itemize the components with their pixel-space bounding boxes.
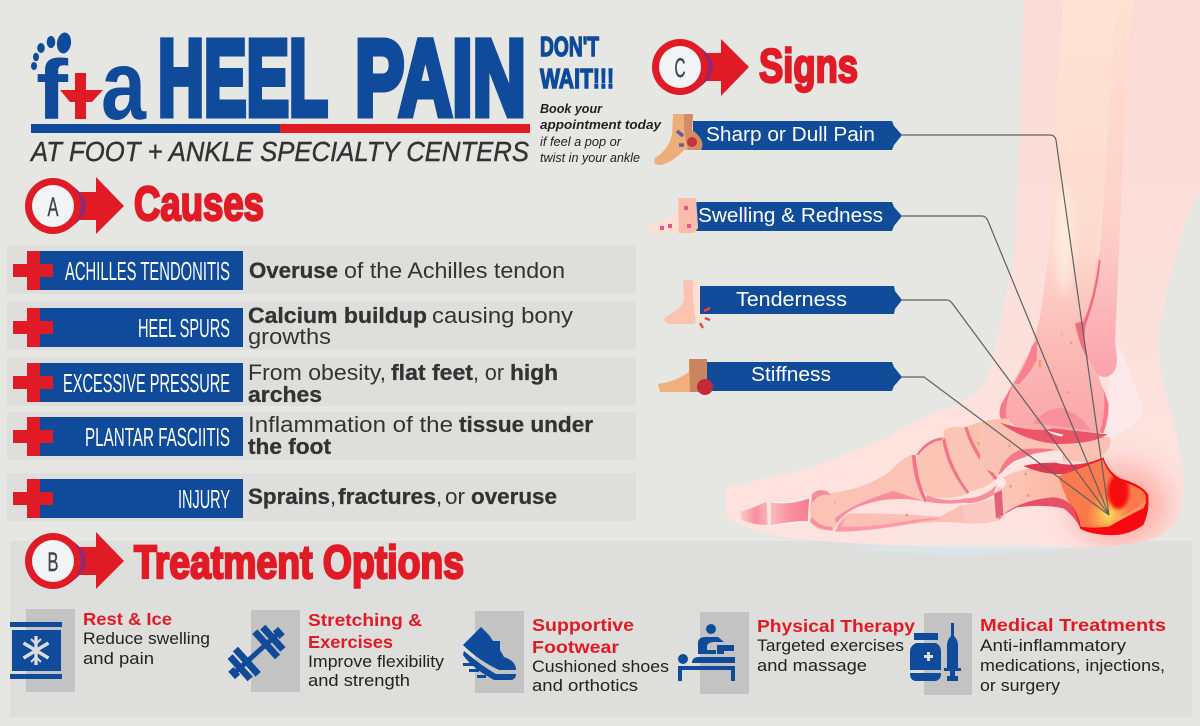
- middle foot segment: [916, 438, 968, 498]
- treatment: rest and ice: and pain: [83, 650, 154, 668]
- call to action: if feel a pop or: [540, 135, 622, 149]
- icon: therapist and patient: [678, 624, 735, 681]
- treatment: stretching and exercises: Exercises: [308, 632, 393, 652]
- heading: C signs: [652, 39, 858, 96]
- treatment: physical therapy: and massage: [757, 657, 867, 675]
- logo: foot + ankle: f: [36, 43, 69, 137]
- call to action: twist in your ankle: [540, 151, 640, 165]
- lower wedge bone: [962, 498, 1000, 524]
- icon: stiff foot: [658, 359, 713, 395]
- treatment: supportive footwear: and orthotics: [532, 677, 638, 695]
- treatment: medical treatments: Medical Treatments: [980, 615, 1166, 635]
- logo: foot + ankle: [31, 30, 147, 140]
- pink line along tibia shaft: [1075, 260, 1101, 360]
- proximal toe: [770, 497, 810, 526]
- title underline: [31, 124, 530, 133]
- treatment: physical therapy: Targeted exercises: [757, 637, 904, 655]
- call to action: WAIT!!!: [540, 63, 614, 94]
- call to action: appointment today: [540, 118, 662, 132]
- call to action: DON'T: [540, 31, 599, 62]
- treatment: medical treatments: or surgery: [980, 677, 1061, 695]
- treatment: rest and ice: Rest & Ice: [83, 609, 172, 629]
- cause: achilles tendonitis: of the Achilles tendon: [344, 258, 565, 283]
- cause: excessive pressure: EXCESSIVE PRESSURE: [63, 368, 230, 398]
- cause: injury: Sprains: [248, 484, 330, 509]
- floor glow under foot: [850, 546, 1070, 552]
- joint dark band: [1000, 423, 1107, 444]
- metatarsal lower edge: [810, 490, 925, 531]
- cause: heel spurs: HEEL SPURS: [138, 313, 230, 343]
- icon: dumbbell: [220, 618, 293, 688]
- callout lines to heel: [902, 135, 1109, 515]
- icon: ice pack: [10, 622, 62, 679]
- sign: swelling and redness: Swelling & Redness: [698, 205, 883, 227]
- treatment: supportive footwear: Cushioned shoes: [532, 658, 669, 676]
- cause: heel spurs: growths: [248, 324, 331, 349]
- cause: heel spurs: [7, 302, 636, 350]
- heading: C signs: C: [674, 53, 686, 83]
- icon: swollen red foot: [647, 198, 698, 233]
- cause: plantar fasciitis: PLANTAR FASCIITIS: [85, 422, 230, 452]
- sign: swelling and redness: [647, 198, 902, 233]
- metatarsal two lower edge: [835, 518, 943, 532]
- segment separators: [912, 427, 997, 503]
- sole band: [927, 485, 997, 504]
- sign: sharp or dull pain: Sharp or Dull Pain: [706, 124, 875, 146]
- talus: [980, 421, 1110, 475]
- cause: excessive pressure: From obesity,: [248, 360, 386, 385]
- treatment: stretching and exercises: Improve flexibility: [308, 653, 445, 671]
- cause: achilles tendonitis: Overuse: [249, 258, 338, 283]
- treatment: physical therapy: Physical Therapy: [757, 616, 915, 636]
- cause: excessive pressure: arches: [248, 382, 322, 407]
- cause: injury: fractures: [338, 484, 436, 509]
- treatment: stretching and exercises: [220, 610, 445, 692]
- panel: treatment options background: [10, 541, 1192, 717]
- treatment: supportive footwear: Supportive: [532, 615, 634, 635]
- heading: C signs: Signs: [759, 39, 858, 92]
- top wedge: [1023, 457, 1104, 474]
- tibia left dark edge: [1014, 340, 1037, 384]
- cause: achilles tendonitis: ACHILLES TENDONITIS: [65, 256, 230, 286]
- sign: sharp or dull pain: [654, 114, 902, 165]
- heading: A causes: Causes: [134, 178, 264, 231]
- cause: injury: ,: [436, 484, 442, 509]
- foot and leg skin: [726, 0, 1200, 548]
- sign: tenderness: Tenderness: [736, 289, 847, 311]
- treatment: medical treatments: [910, 613, 1166, 695]
- sign: stiffness: Stiffness: [751, 364, 831, 386]
- bone speckle: [834, 442, 980, 516]
- white gap: [998, 453, 1063, 477]
- cause: plantar fasciitis: tissue under: [459, 412, 593, 437]
- distal toe: [740, 502, 768, 525]
- lower tibia outline: [1000, 383, 1108, 433]
- calcaneus lower edge: [1003, 497, 1081, 529]
- sign: tenderness: [664, 280, 902, 328]
- cause: injury: INJURY: [178, 484, 230, 514]
- cause: excessive pressure: [7, 358, 636, 407]
- cause: excessive pressure: , or: [473, 360, 504, 385]
- talus head segment: [965, 418, 1010, 478]
- cause: plantar fasciitis: [7, 412, 636, 460]
- icon: running shoe: [463, 627, 516, 680]
- tibia: [999, 0, 1117, 433]
- treatment: rest and ice: Reduce swelling: [83, 630, 210, 648]
- cause: excessive pressure: flat feet: [391, 360, 474, 385]
- heading: B treatment options: B: [48, 547, 58, 577]
- cause: excessive pressure: high: [510, 360, 558, 385]
- subtitle: AT FOOT + ANKLE SPECIALTY CENTERS: [29, 136, 529, 167]
- treatment: stretching and exercises: and strength: [308, 672, 410, 690]
- foot anatomy illustration: [726, 0, 1200, 552]
- lower tibia dome: [1033, 408, 1090, 430]
- treatment: medical treatments: Anti-inflammatory: [980, 637, 1127, 655]
- cause: achilles tendonitis: [7, 246, 636, 294]
- title: heel pain: HEEL: [158, 17, 328, 138]
- logo: foot + ankle: a: [101, 30, 147, 140]
- bone speckles: [1008, 444, 1030, 497]
- left foot bones dark strip: [994, 490, 1003, 518]
- cause: injury: ,: [330, 484, 336, 509]
- sign: stiffness: [658, 359, 902, 395]
- calcaneus: [995, 457, 1103, 528]
- cause: plantar fasciitis: Inflammation of the: [248, 412, 453, 437]
- heading: A causes: A: [48, 192, 58, 222]
- call to action: Book your: [540, 102, 603, 116]
- cause: injury: [7, 473, 636, 521]
- treatment: physical therapy: [678, 612, 915, 694]
- wedge bone: [943, 427, 997, 492]
- title: heel pain: PAIN: [355, 17, 526, 138]
- panel: causes list: [7, 246, 636, 521]
- treatment: supportive footwear: Footwear: [532, 637, 619, 657]
- cause: heel spurs: causing bony: [432, 303, 573, 328]
- fibula: [1075, 0, 1133, 377]
- cause: heel spurs: Calcium buildup: [248, 303, 427, 328]
- tibia highlight: [1056, 185, 1072, 295]
- icon: tender foot: [664, 280, 710, 328]
- call to action: [540, 31, 662, 165]
- heading: A causes: [25, 177, 264, 234]
- cause: plantar fasciitis: the foot: [248, 434, 332, 459]
- cause: injury: overuse: [471, 484, 557, 509]
- heel inflammation glow: [1072, 465, 1168, 545]
- painful heel: [1058, 458, 1149, 536]
- icon: medicine bottle and syringe: [910, 623, 961, 681]
- heading: B treatment options: [25, 532, 464, 589]
- treatment: medical treatments: medications, injections,: [980, 657, 1165, 675]
- treatment: supportive footwear: [463, 611, 669, 695]
- metatarsal two: [835, 505, 967, 532]
- talus lower dark bone: [998, 448, 1056, 475]
- pale back of ankle highlight: [1108, 343, 1143, 438]
- icon: foot with pain spot: [654, 114, 702, 165]
- white sliver: [1047, 431, 1063, 437]
- heading: B treatment options: Treatment Options: [134, 536, 464, 588]
- treatment: stretching and exercises: Stretching &: [308, 610, 422, 630]
- metatarsal one: [810, 455, 925, 530]
- icon: footprint toes: [31, 32, 72, 70]
- dark cuneiform edge: [995, 493, 1003, 519]
- treatment: rest and ice: [10, 609, 210, 692]
- bone speckles: [1039, 333, 1072, 394]
- cause: injury: or: [445, 484, 465, 509]
